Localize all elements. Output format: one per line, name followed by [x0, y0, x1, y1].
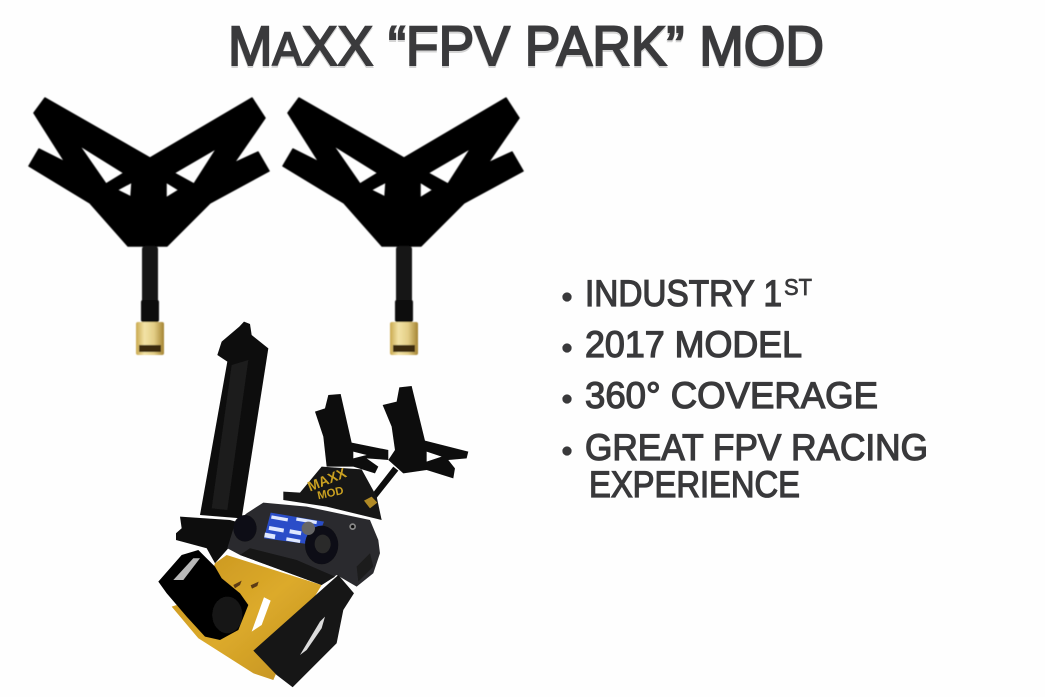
icon: right antenna — [283, 98, 523, 355]
bullet list — [563, 272, 928, 505]
screen — [264, 513, 324, 545]
bullet: 2017 model: 2017 MODEL — [585, 323, 802, 365]
phone holder arm — [176, 322, 268, 563]
antenna clips — [315, 386, 468, 478]
icon: controller with antenna mount — [158, 322, 468, 687]
bullet: industry first: ST — [784, 274, 812, 300]
icon: controller with antenna mount: MAXX — [305, 464, 349, 494]
title: MAXX “FPV PARK” MOD — [228, 16, 824, 79]
bullet: great fpv racing experience: GREAT FPV RACING — [585, 426, 928, 468]
logo wedge — [283, 467, 382, 520]
joysticks — [305, 526, 338, 564]
plate cutouts — [233, 581, 259, 589]
bullet: industry first: INDUSTRY 1 — [585, 272, 782, 314]
bullet: great fpv racing experience: EXPERIENCE — [589, 463, 800, 505]
plate slots — [252, 597, 271, 632]
controller right grip — [253, 575, 354, 687]
camera lens — [158, 550, 248, 640]
title: MAXX “FPV PARK” MOD — [228, 14, 824, 77]
bullet: 360 coverage: 360° COVERAGE — [585, 374, 878, 416]
icon: controller with antenna mount: MOD — [316, 485, 345, 502]
controller body — [227, 503, 380, 587]
bullet: great fpv racing experience — [563, 426, 928, 505]
gold mount plate — [172, 555, 322, 680]
antenna connector — [364, 497, 377, 508]
icon: left antenna — [29, 98, 269, 355]
